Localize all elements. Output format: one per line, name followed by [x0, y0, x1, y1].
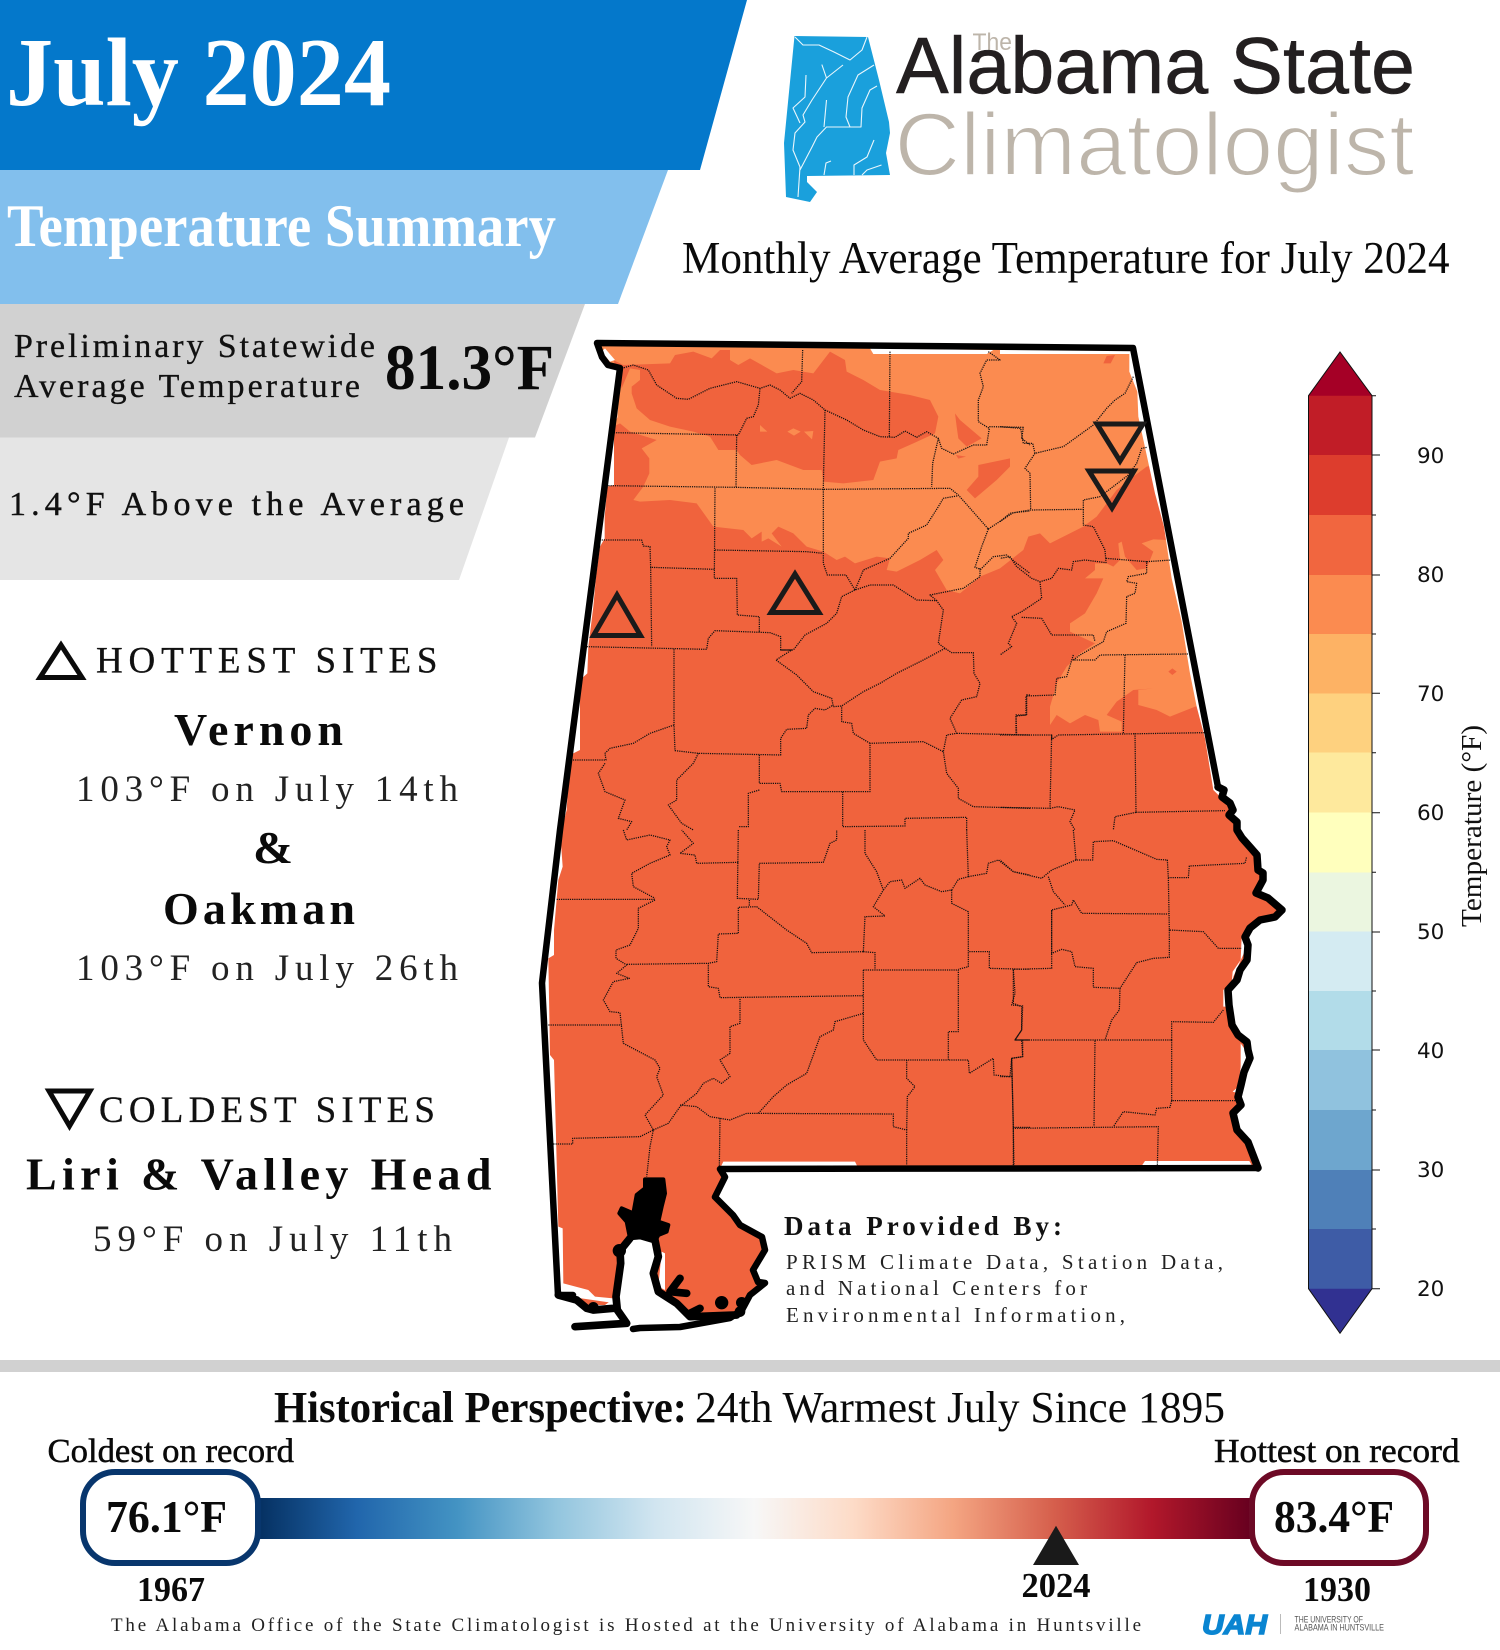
label: coldest on record: Coldest on record [48, 1433, 294, 1470]
color bar ticks [1372, 396, 1380, 1289]
text: ampersand: & [253, 822, 293, 873]
map: county boundaries north-east [1000, 377, 1225, 830]
panel: historical perspective [48, 1383, 1460, 1609]
site: Oakman: Oakman [163, 883, 355, 934]
color bar labels: 50 [1417, 920, 1444, 945]
color bar labels [1417, 444, 1444, 1302]
site: Vernon: Vernon [174, 704, 343, 755]
marker: 2024 position [1033, 1526, 1079, 1565]
heading: historical perspective [274, 1383, 1225, 1432]
panel: anomaly [0, 438, 509, 580]
map: county boundaries north-west [572, 350, 1030, 830]
map: cooler temperature band [597, 340, 1203, 732]
map: warm base fill [542, 343, 1282, 1320]
label: 1967: 1967 [137, 1570, 205, 1609]
color bar labels: 30 [1417, 1158, 1444, 1183]
map: Georgia river border [1218, 787, 1282, 1168]
map: Alabama monthly average temperature [542, 340, 1282, 1329]
color bar labels: 20 [1417, 1277, 1444, 1302]
text: statewide average label [14, 328, 375, 405]
map: warmer temperature patches [613, 350, 1177, 675]
text block: data sources [784, 1211, 1223, 1327]
panel: month banner [0, 0, 747, 170]
divider bar [0, 1360, 1500, 1372]
map: county boundaries south-west [548, 830, 1030, 1177]
reading: coldest temperature: 59°F on July 11th [93, 1219, 452, 1260]
label: hottest on record: Hottest on record [1214, 1433, 1460, 1470]
icon: hottest site marker Vernon [594, 595, 640, 636]
logo text: Alabama State: Alabama State [896, 21, 1415, 110]
color bar swatches [1308, 396, 1372, 1289]
logo: Alabama State Climatologist [784, 21, 1415, 202]
logo text: The: The [972, 29, 1012, 56]
panel: hottest sites [40, 640, 458, 989]
label: 2024: 2024 [1022, 1566, 1090, 1605]
panel: temperature summary banner [0, 170, 668, 304]
callout: coldest value [83, 1472, 258, 1563]
color bar labels: 70 [1417, 682, 1444, 707]
reading: Vernon temperature: 103°F on July 14th [76, 769, 458, 810]
value: 81.3°F: 81.3°F [385, 332, 554, 404]
logo text: university name: ALABAMA IN HUNTSVILLE [1294, 1623, 1384, 1633]
panel: statewide average [0, 304, 585, 438]
color bar labels: 60 [1417, 801, 1444, 826]
heading: map title: Monthly Average Temperature for July 2024 [682, 233, 1450, 283]
heading: hottest sites: HOTTEST SITES [96, 640, 438, 682]
logo: University of Alabama in Huntsville [1202, 1609, 1384, 1640]
color bar top arrow [1308, 352, 1372, 396]
color bar labels: 40 [1417, 1039, 1444, 1064]
logo text: Climatologist: Climatologist [894, 94, 1415, 194]
text block: data sources: and National Centers for [786, 1276, 1087, 1300]
callout: hottest value [1252, 1472, 1426, 1563]
icon: Alabama river map [784, 36, 890, 202]
icon: coldest site marker Liri [1089, 471, 1134, 508]
color bar frame [1308, 352, 1372, 1333]
legend: temperature color bar [1308, 352, 1488, 1333]
reading: Oakman temperature: 103°F on July 26th [76, 948, 458, 989]
logo mark: UAH: UAH [1202, 1609, 1268, 1640]
panel: coldest sites [26, 1090, 492, 1260]
icon: hottest site marker Oakman [771, 574, 819, 612]
gradient scale bar [258, 1498, 1251, 1539]
color bar bottom arrow [1308, 1289, 1372, 1333]
callout: hottest value: 83.4°F [1274, 1491, 1394, 1542]
map: white gaps along state edge [542, 348, 1253, 1303]
text: anomaly value: 1.4°F Above the Average [9, 486, 464, 523]
color bar axis title: Temperature (°F) [1457, 725, 1488, 927]
icon: coldest triangle [49, 1091, 90, 1126]
text: statewide average label: Average Temperature [14, 368, 360, 405]
text block: data sources: Environmental Information, [786, 1303, 1125, 1327]
label: 1930: 1930 [1303, 1570, 1371, 1609]
icon: coldest site marker Valley Head [1097, 424, 1143, 461]
logo text: university name: THE UNIVERSITY OF [1294, 1615, 1363, 1625]
heading: historical perspective: 24th Warmest July Since 1895 [695, 1383, 1225, 1432]
callout: coldest value: 76.1°F [106, 1491, 227, 1542]
color bar labels: 80 [1417, 563, 1444, 588]
footer credit: The Alabama Office of the State Climatologist is Hosted at the University of Alabama in Huntsville [111, 1615, 1141, 1636]
heading: historical perspective: Historical Perspective: [274, 1383, 687, 1432]
map: Mobile Bay coastline [558, 1179, 747, 1327]
text block: data sources: Data Provided By: [784, 1211, 1062, 1241]
heading: Temperature Summary: Temperature Summary [7, 193, 556, 259]
text block: data sources: PRISM Climate Data, Station Data, [786, 1250, 1223, 1274]
icon: hottest triangle [40, 645, 82, 678]
logo text: university name [1294, 1615, 1384, 1633]
text: statewide average label: Preliminary Statewide [14, 328, 375, 365]
map: state outline [542, 343, 1258, 1329]
map: county boundaries south-east [1000, 830, 1247, 1167]
title: July 2024: July 2024 [6, 19, 391, 127]
heading: coldest sites: COLDEST SITES [99, 1090, 435, 1131]
site: Liri and Valley Head: Liri & Valley Head [26, 1148, 492, 1200]
color bar labels: 90 [1417, 444, 1444, 469]
